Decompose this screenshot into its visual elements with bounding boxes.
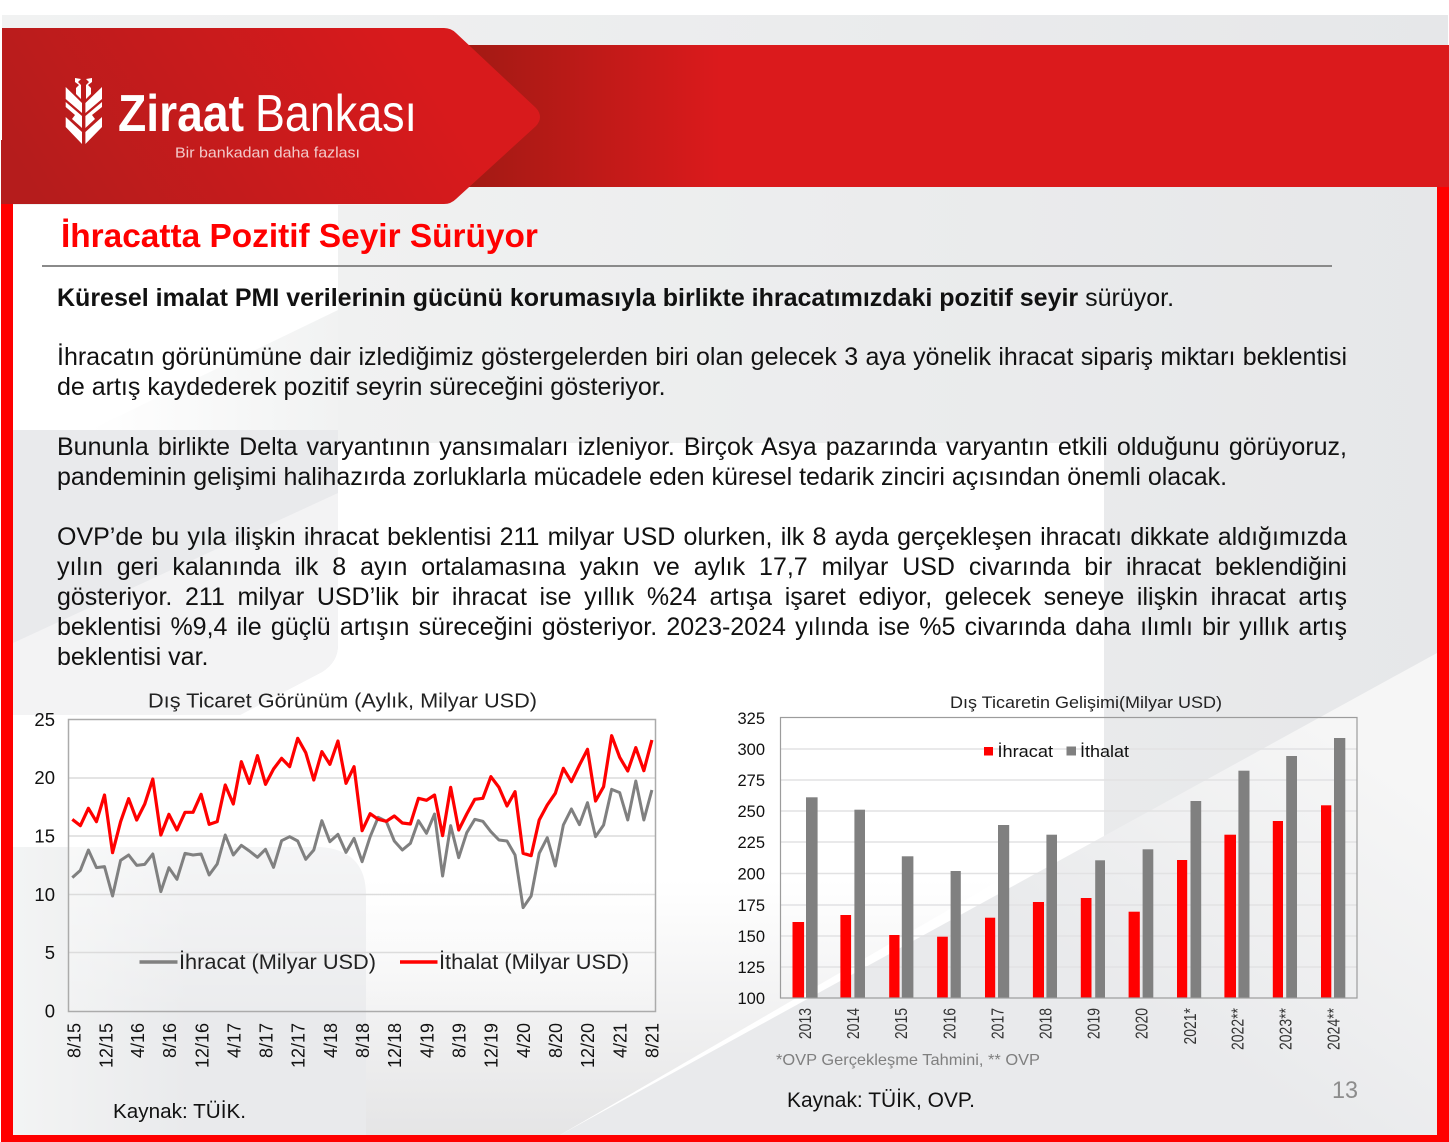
page number: 13 <box>1332 1077 1358 1104</box>
line chart: monthly foreign trade <box>34 690 662 1123</box>
y axis labels: 100 <box>737 990 765 1008</box>
text block: intro: Küresel imalat PMI verilerinin gücünü korumasıyla birlikte ihracatımızdaki pozitif seyir sürüyor. <box>57 284 1174 312</box>
text block: delta variant <box>57 433 1347 491</box>
source right: Kaynak: TÜİK, OVP. <box>787 1089 975 1112</box>
x axis labels: 12/18 <box>385 1023 405 1068</box>
bars: ithalat <box>806 738 1345 998</box>
x axis labels: 8/16 <box>160 1023 180 1058</box>
header tab with logo: Bankası <box>255 85 417 143</box>
y axis labels: 325 <box>737 710 765 728</box>
legend <box>140 951 629 974</box>
logo wordmark: Ziraat <box>118 85 244 143</box>
x axis labels: 2017 <box>989 1008 1008 1039</box>
x axis labels: 4/17 <box>224 1023 244 1058</box>
x axis labels <box>64 1023 662 1068</box>
text block: OVP expectations: gösteriyor. 211 milyar USD’lik bir ihracat ise yıllık %24 artışa işaret ediyor, gelecek seneye ilişkin ihracat artış <box>57 582 1347 610</box>
title: İhracatta Pozitif Seyir Sürüyor <box>61 218 538 255</box>
y axis labels: 275 <box>737 772 765 790</box>
text block: delta variant: pandeminin gelişimi halihazırda zorluklarla mücadele eden küresel tedarik zinciri açısından önemli olacak. <box>57 463 1227 491</box>
y axis labels: 125 <box>737 959 765 977</box>
y axis labels: 5 <box>45 942 55 963</box>
x axis labels: 12/16 <box>192 1023 212 1068</box>
text block: export orders: İhracatın görünümüne dair izlediğimiz göstergelerden biri olan gelecek 3 aya yönelik ihracat sipariş miktarı beklentisi <box>57 343 1347 371</box>
y axis labels: 225 <box>737 834 765 852</box>
text block: OVP expectations: yılın geri kalanında ilk 8 ayın ortalamasına yakın ve aylık 17,7 milyar USD civarında bir ihracat beklendiğini <box>57 552 1347 580</box>
text block: OVP expectations: beklentisi var. <box>57 642 208 670</box>
text block: OVP expectations <box>57 522 1348 670</box>
x axis labels: 4/21 <box>610 1023 630 1058</box>
x axis labels: 8/21 <box>642 1023 662 1058</box>
x axis labels: 2013 <box>797 1008 815 1039</box>
x axis labels: 4/16 <box>128 1023 148 1058</box>
source left: Kaynak: TÜİK. <box>113 1100 246 1123</box>
legend: İhracat (Milyar USD) <box>179 951 376 974</box>
x axis labels: 12/19 <box>482 1023 502 1068</box>
text block: OVP expectations: beklentisi %9,4 ile güçlü artışın süreceğini gösteriyor. 2023-2024 yılında ise %5 civarında daha ılımlı bir yıllık artış <box>57 612 1347 640</box>
x axis labels <box>797 1008 1344 1050</box>
x axis labels: 2020 <box>1133 1008 1152 1039</box>
x axis labels: 8/20 <box>546 1023 566 1058</box>
x axis labels: 2018 <box>1037 1008 1056 1039</box>
x axis labels: 8/19 <box>450 1023 470 1058</box>
x axis labels: 2019 <box>1085 1008 1104 1039</box>
text block: delta variant: Bununla birlikte Delta varyantının yansımaları izleniyor. Birçok Asya pazarında varyantın etkili olduğunu görüyoruz, <box>57 433 1347 461</box>
legend: İthalat <box>1080 742 1129 761</box>
y axis labels: 15 <box>34 826 55 846</box>
legend <box>984 742 1129 761</box>
x axis labels: 8/15 <box>64 1023 84 1058</box>
x axis labels: 12/17 <box>288 1023 308 1068</box>
x axis labels: 2023** <box>1277 1008 1296 1050</box>
x axis labels: 2024** <box>1325 1008 1344 1050</box>
header tab with logo <box>1 28 540 204</box>
text block: export orders <box>57 343 1347 401</box>
bars: ihracat <box>792 805 1331 998</box>
x axis labels: 2014 <box>845 1008 863 1039</box>
y axis labels: 25 <box>34 709 55 730</box>
x axis labels: 12/20 <box>578 1023 598 1068</box>
legend: İthalat (Milyar USD) <box>439 951 629 974</box>
y axis labels: 300 <box>737 741 765 759</box>
y axis labels: 10 <box>34 884 55 905</box>
header band <box>468 45 1449 187</box>
x axis labels: 4/19 <box>418 1023 438 1058</box>
chart title: Dış Ticaret Görünüm (Aylık, Milyar USD) <box>148 690 537 712</box>
x axis labels: 2021* <box>1182 1008 1200 1045</box>
x axis labels: 8/18 <box>353 1023 373 1058</box>
y axis labels: 200 <box>737 866 765 884</box>
title rule <box>42 265 1332 267</box>
text block: OVP expectations: OVP’de bu yıla ilişkin ihracat beklentisi 211 milyar USD olurken, ilk 8 ayda gerçekleşen ihracatı dikkate aldığımızda <box>57 522 1347 550</box>
icon: wheat logo <box>66 78 102 144</box>
legend: İhracat <box>998 742 1053 761</box>
x axis labels: 8/17 <box>256 1023 276 1058</box>
y axis labels <box>34 709 55 1022</box>
y axis labels: 150 <box>737 928 765 946</box>
y axis labels: 250 <box>737 803 765 821</box>
x axis labels: 4/18 <box>321 1023 341 1058</box>
series: ihracat <box>72 781 652 908</box>
text block: export orders: de artış kaydederek pozitif seyrin süreceğini gösteriyor. <box>57 373 666 401</box>
x axis labels: 2022** <box>1229 1008 1248 1050</box>
x axis labels: 2015 <box>893 1008 911 1039</box>
series: ithalat <box>72 736 652 856</box>
x axis labels: 2016 <box>941 1008 960 1039</box>
y axis labels: 20 <box>34 767 55 788</box>
y axis labels: 0 <box>45 1000 55 1022</box>
logo tagline: Bir bankadan daha fazlası <box>175 146 360 162</box>
chart title: Dış Ticaretin Gelişimi(Milyar USD) <box>950 693 1222 712</box>
x axis labels: 12/15 <box>96 1023 116 1068</box>
footnote: *OVP Gerçekleşme Tahmini, ** OVP <box>776 1052 1040 1069</box>
y axis labels <box>737 710 765 1008</box>
x axis labels: 4/20 <box>514 1023 534 1058</box>
y axis labels: 175 <box>737 897 765 915</box>
